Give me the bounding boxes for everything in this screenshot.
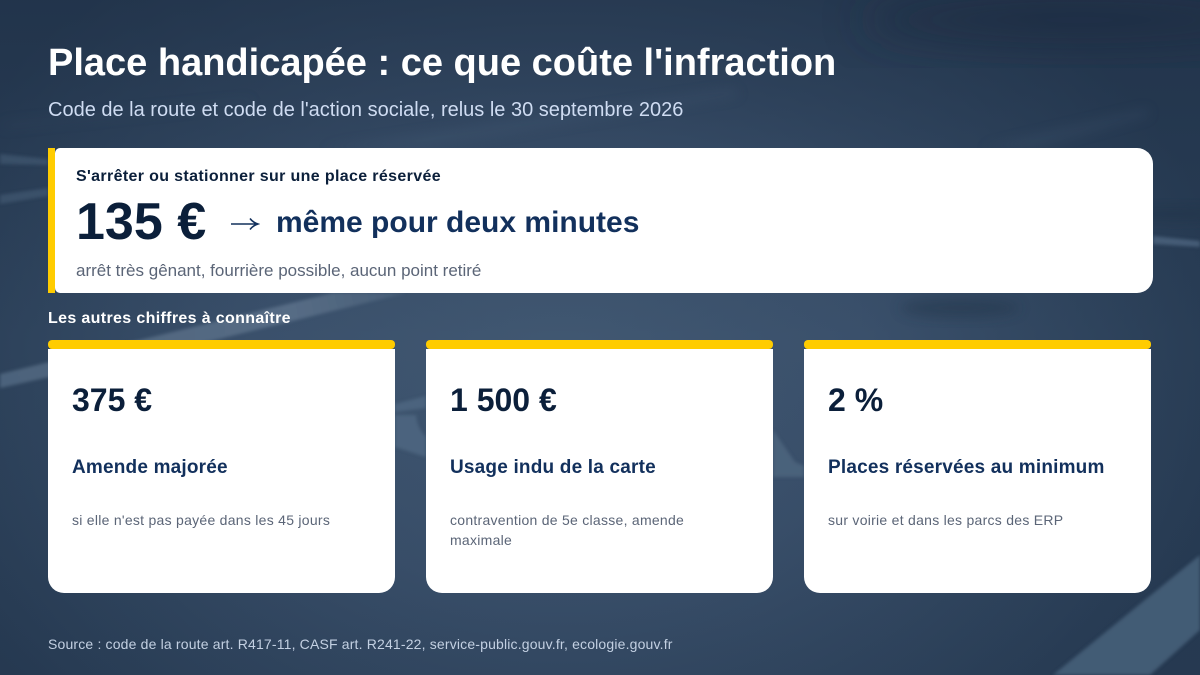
card title: Usage indu de la carte (450, 457, 656, 478)
value: 1 500 € (450, 382, 557, 418)
value: 375 € (72, 382, 152, 418)
white callout background (55, 148, 1153, 293)
card title: Places réservées au minimum (828, 457, 1105, 478)
panel: card 1 500 euros (426, 340, 773, 593)
card title: Amende majorée (72, 457, 228, 478)
arrow (231, 218, 260, 230)
panel: main fine callout (48, 148, 1153, 293)
card description: maximale (450, 532, 512, 548)
panel: card 2 percent (804, 340, 1151, 593)
callout label: S'arrêter ou stationner sur une place réservée (76, 168, 441, 185)
card description: contravention de 5e classe, amende (450, 512, 684, 528)
callout statement: même pour deux minutes (276, 206, 639, 239)
panel: card 375 euros (48, 340, 813, 593)
source line: Source : code de la route art. R417-11, CASF art. R241-22, service-public.gouv.fr, ecologie.gouv.fr (48, 636, 673, 652)
card description: si elle n'est pas payée dans les 45 jours (72, 512, 330, 528)
title: Place handicapée : ce que coûte l'infraction (48, 42, 836, 84)
main amount: 135 € (76, 193, 206, 251)
subtitle: Code de la route et code de l'action sociale, relus le 30 septembre 2026 (48, 99, 683, 121)
yellow accent bar (48, 148, 55, 293)
value: 2 % (828, 382, 883, 418)
section heading: Les autres chiffres à connaître (48, 310, 291, 327)
card description: sur voirie et dans les parcs des ERP (828, 512, 1063, 528)
callout note: arrêt très gênant, fourrière possible, aucun point retiré (76, 261, 481, 280)
card description (450, 512, 684, 548)
